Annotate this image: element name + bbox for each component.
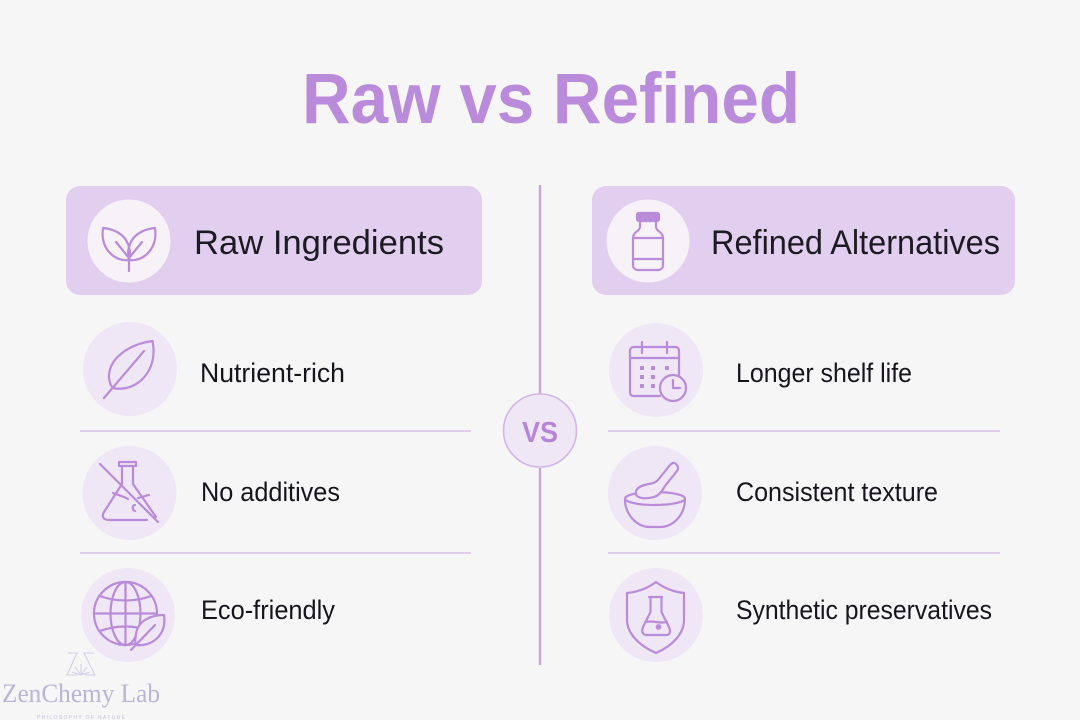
label: eco-friendly: Eco-friendly	[201, 595, 335, 625]
item: synthetic preservatives	[609, 568, 992, 662]
logo: ZenChemy Lab	[2, 653, 160, 720]
icon: crossed-out flask	[100, 462, 158, 522]
heading: raw ingredients: Raw Ingredients	[194, 224, 444, 262]
icon: shield with flask	[627, 582, 684, 653]
header: refined alternatives	[592, 186, 1015, 295]
panel: raw ingredients column	[66, 186, 482, 666]
center divider with VS badge	[504, 185, 576, 665]
heading: refined alternatives: Refined Alternatives	[711, 224, 1000, 262]
icon: globe with leaf	[94, 582, 164, 650]
item: longer shelf life	[609, 323, 912, 417]
label: consistent texture: Consistent texture	[736, 477, 938, 507]
header: raw ingredients	[66, 186, 482, 295]
label: longer shelf life: Longer shelf life	[736, 358, 912, 388]
icon: bowl with spoon	[625, 463, 685, 527]
item: eco-friendly	[81, 568, 335, 662]
label: no additives: No additives	[201, 477, 340, 507]
icon: bottle	[633, 213, 663, 270]
item: nutrient-rich	[83, 322, 345, 416]
label: synthetic preservatives: Synthetic preservatives	[736, 595, 992, 625]
label: nutrient-rich: Nutrient-rich	[200, 358, 345, 388]
item: consistent texture	[608, 446, 938, 540]
item: no additives	[82, 446, 340, 540]
VS label: VS	[522, 417, 558, 449]
logo wordmark: ZenChemy Lab	[2, 679, 160, 708]
icon: leaf	[104, 341, 154, 398]
icon: calendar with clock	[630, 342, 686, 401]
icon: sprout	[103, 228, 155, 271]
title: Raw vs Refined	[302, 60, 800, 139]
panel: refined alternatives column	[592, 186, 1015, 666]
